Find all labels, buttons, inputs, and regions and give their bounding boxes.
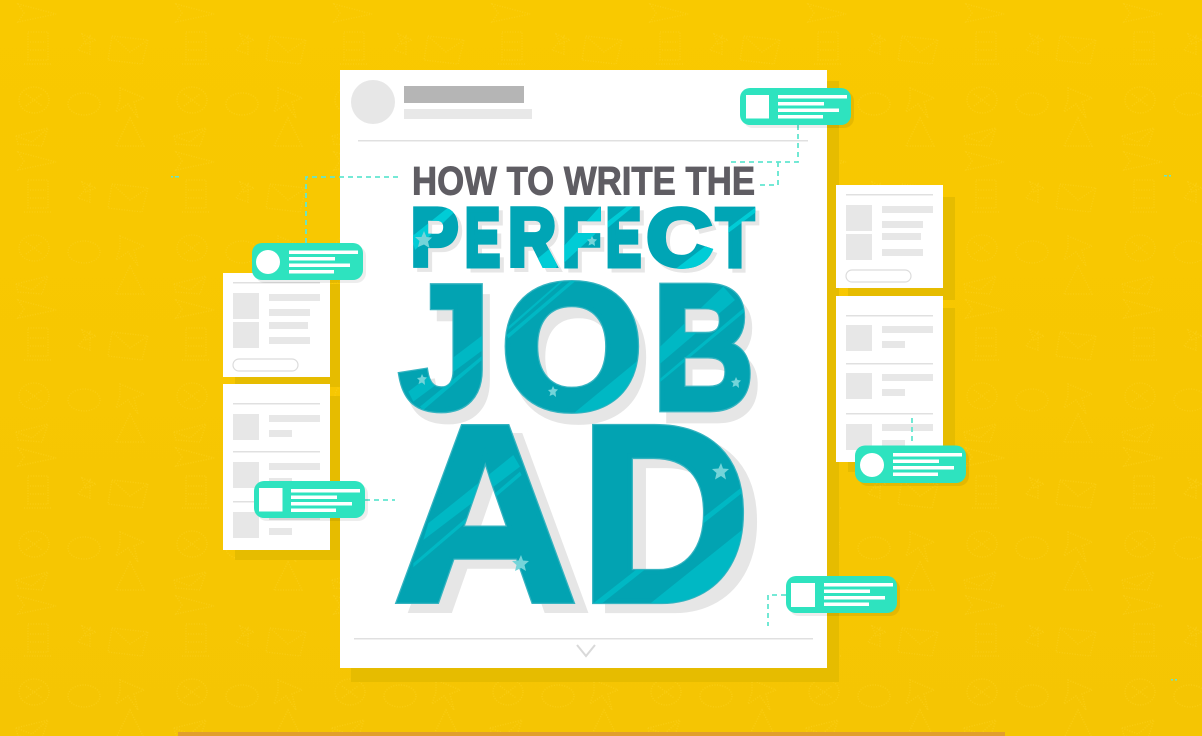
title: perfect: R (512, 196, 560, 287)
icon: star on D (712, 463, 729, 480)
icon: down chevron (577, 645, 595, 656)
title: perfect: E (465, 192, 500, 283)
icon: star on B (731, 377, 741, 388)
title: perfect: F (566, 197, 605, 287)
title: job ad (394, 280, 758, 613)
title: job ad: O (501, 248, 643, 447)
icon: star on P (415, 231, 432, 248)
title: perfect: F (562, 193, 601, 283)
title: job ad: J (399, 249, 491, 446)
title: job ad: B (660, 259, 761, 457)
title: job ad: B (653, 248, 754, 446)
title: perfect: P (415, 197, 462, 288)
title: job ad: D (580, 373, 751, 654)
title: perfect: C (650, 197, 716, 287)
callout: top right (740, 88, 854, 128)
footer divider (354, 638, 813, 640)
title: job ad: O (501, 248, 643, 447)
panel: left lower card (223, 384, 330, 550)
title: job ad: O (508, 259, 650, 458)
header avatar (351, 80, 395, 124)
icon: star on F (587, 236, 597, 246)
connector: right callout (911, 418, 913, 445)
title: perfect: R (508, 192, 556, 283)
title: job ad: J (399, 249, 491, 446)
title: job ad: A (393, 373, 577, 654)
small teal specks (171, 175, 1177, 680)
title: perfect (413, 206, 760, 273)
panel: main job ad sheet (340, 70, 827, 668)
callout: right (855, 446, 969, 486)
title: perfect: E (606, 192, 641, 283)
title: how to write the: HOW TO WRITE THE (412, 160, 755, 204)
connector: left upper callout (306, 177, 398, 243)
panel: right lower card (836, 296, 943, 462)
icon: star on J (417, 374, 427, 385)
connector: bottom callout (768, 595, 786, 626)
header divider (358, 140, 808, 142)
title: perfect: C (646, 193, 712, 283)
title: job ad: A (393, 373, 577, 654)
title: job ad: J (406, 260, 498, 457)
icon: star on A (512, 555, 529, 571)
title: job ad: A (406, 382, 590, 663)
title: job ad: D (580, 373, 751, 654)
icon: star on O (548, 386, 558, 397)
title: perfect: T (716, 193, 754, 284)
panel: right upper card (836, 185, 943, 288)
title: perfect: E (610, 196, 645, 287)
title: perfect: P (411, 193, 458, 284)
panel: left upper card (223, 273, 330, 377)
title: perfect: E (469, 196, 504, 287)
title: job ad: D (593, 382, 764, 663)
header bars (404, 86, 532, 119)
connector: top callout (730, 125, 798, 185)
title: job ad: B (653, 248, 754, 446)
panel shadows (235, 81, 955, 682)
connector: left lower callout (365, 499, 395, 501)
callout: left lower (254, 481, 368, 521)
callout: left upper (252, 243, 366, 283)
bottom edge bar (178, 732, 1005, 736)
title: perfect: T (720, 197, 758, 288)
callout: bottom right (786, 576, 900, 616)
